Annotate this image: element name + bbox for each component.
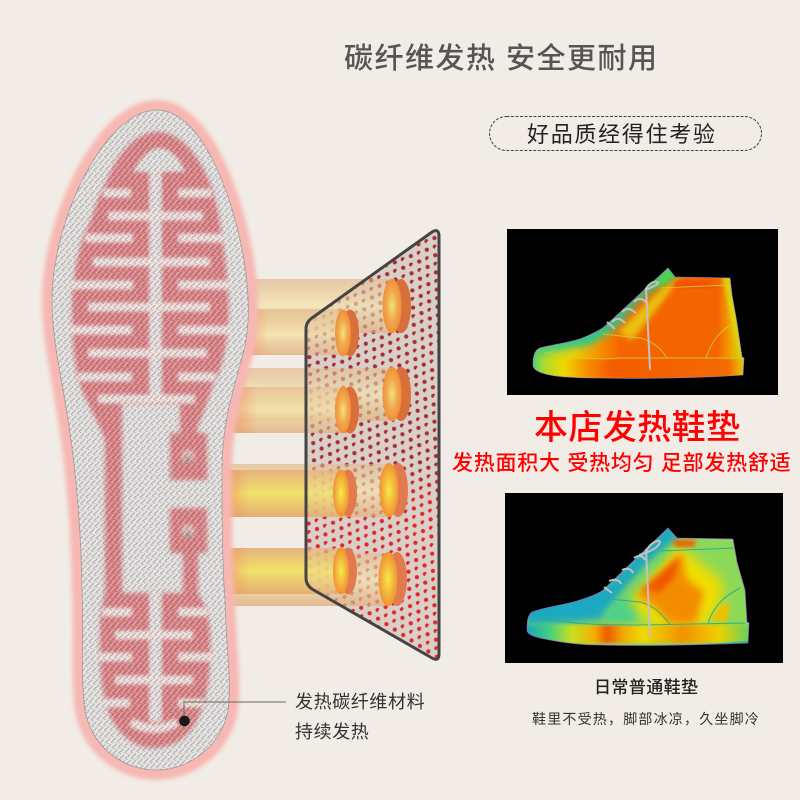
seams (545, 285, 738, 359)
cool vamp (530, 262, 684, 352)
fabric grain (52, 110, 248, 770)
contact points (181, 449, 195, 538)
heating discs (333, 279, 411, 606)
warm body (628, 545, 722, 628)
dashed pill subtitle (490, 116, 762, 150)
thermal image: heated insole (507, 229, 778, 395)
panel: enlarged heating element (300, 225, 445, 665)
heading: ordinary insole: 日常普通鞋垫 (594, 678, 698, 697)
heat beams behind sole (221, 279, 396, 606)
leader line and dot (179, 702, 286, 726)
laces (607, 282, 659, 370)
heading: this store's insole: 本店发热鞋垫 (534, 409, 740, 447)
sole heat band (525, 625, 755, 643)
panel border (306, 231, 439, 659)
title: 碳纤维发热 安全更耐用 (344, 42, 659, 75)
dashed pill subtitle: 好品质经得住考验 (527, 122, 717, 147)
callout text (295, 692, 425, 742)
subheading: benefits: 发热面积大 受热均匀 足部发热舒适 (452, 452, 791, 475)
carbon fibre circuit (52, 110, 248, 770)
sole shade (528, 359, 750, 378)
collar heat band (672, 281, 712, 288)
callout text: 持续发热 (295, 722, 369, 742)
seams (535, 548, 745, 625)
dot pattern (308, 236, 438, 658)
insole with heating circuit (52, 110, 248, 770)
thermal image: ordinary insole (505, 493, 783, 663)
beams inside panel (300, 279, 395, 606)
caption: ordinary insole: 鞋里不受热，脚部冰凉，久坐脚冷 (532, 711, 760, 727)
cool toe and vamp (522, 522, 682, 626)
callout text: 发热碳纤维材料 (295, 692, 425, 712)
laces (604, 541, 660, 637)
glow halo (52, 110, 248, 770)
outline glow (527, 528, 749, 645)
